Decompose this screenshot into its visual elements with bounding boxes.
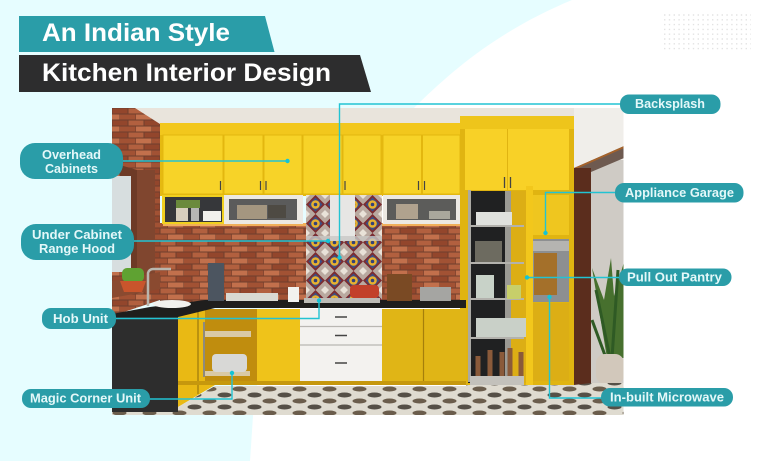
base cabinets xyxy=(112,309,466,412)
label: Under Cabinet Range Hood: Under Cabinet xyxy=(32,228,123,242)
label: Pull Out Pantry: Pull Out Pantry xyxy=(627,270,722,284)
title: Kitchen Interior Design: Kitchen Interior Design xyxy=(42,59,331,87)
label: Backsplash: Backsplash xyxy=(635,97,705,111)
label: Appliance Garage: Appliance Garage xyxy=(625,186,734,200)
in-built microwave xyxy=(533,239,569,302)
tile backsplash and range hood xyxy=(306,195,382,300)
magic corner unit xyxy=(203,322,251,377)
title: An Indian Style: An Indian Style xyxy=(42,19,230,47)
label: Backsplash xyxy=(337,94,720,260)
wood post and plant xyxy=(574,168,624,385)
countertop, sink and appliances xyxy=(112,263,466,317)
label: Hob Unit xyxy=(42,298,321,329)
label: Pull Out Pantry xyxy=(525,268,732,286)
title: An Indian Style xyxy=(19,16,274,52)
label: Overhead Cabinets: Overhead xyxy=(42,148,101,162)
open shelves xyxy=(162,195,460,224)
label: In-built Microwave: In-built Microwave xyxy=(610,390,724,404)
brick wall xyxy=(112,108,466,316)
label: In-built Microwave xyxy=(547,295,733,406)
label: Under Cabinet Range Hood: Range Hood xyxy=(39,242,115,256)
patterned floor xyxy=(112,383,624,415)
label: Under Cabinet Range Hood xyxy=(21,224,330,260)
label: Appliance Garage xyxy=(543,183,744,235)
window xyxy=(112,165,160,298)
label: Hob Unit: Hob Unit xyxy=(53,312,109,326)
title: Kitchen Interior Design xyxy=(19,55,371,92)
pull out pantry xyxy=(468,186,533,392)
label: Magic Corner Unit: Magic Corner Unit xyxy=(30,392,142,406)
tall cabinet xyxy=(460,116,574,385)
label: Overhead Cabinets: Cabinets xyxy=(45,162,98,176)
kitchen photo illustration xyxy=(112,108,624,415)
overhead cabinets xyxy=(160,123,462,196)
label: Magic Corner Unit xyxy=(22,371,234,408)
ceiling and walls xyxy=(112,108,624,388)
decorative dot grid xyxy=(664,15,751,49)
label: Overhead Cabinets xyxy=(20,143,290,179)
